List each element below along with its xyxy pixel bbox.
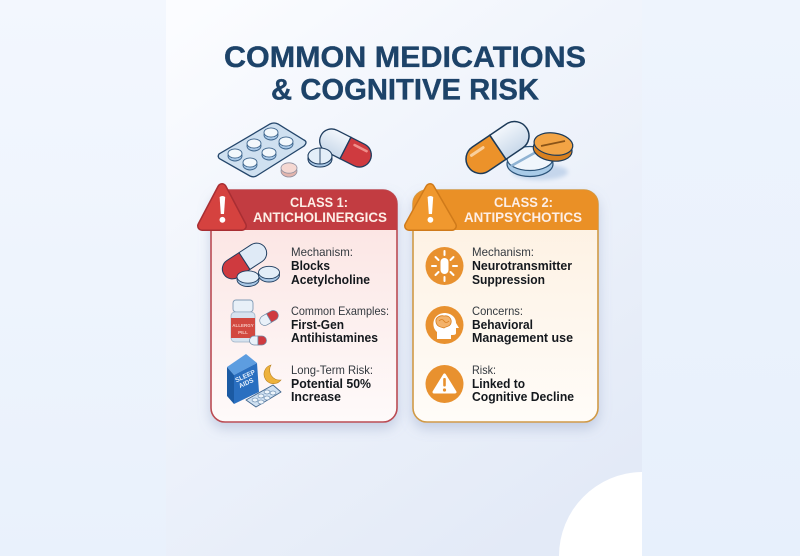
class 2 heading [464,195,582,225]
split tablet [308,148,332,167]
text: risk: Risk: [472,363,496,377]
card body [413,190,598,422]
class 2 heading: ANTIPSYCHOTICS [464,210,582,225]
text: concerns: Management use [472,330,573,345]
icon: sleep aids box [227,354,281,407]
text: long-term risk: Potential 50% [291,376,371,391]
text: risk: Cognitive Decline [472,389,574,404]
title [224,41,586,106]
icon: sleep aids box: SLEEP [234,369,257,384]
text: long-term risk: Long-Term Risk: [291,363,373,377]
pink pill [281,163,297,177]
text: common examples: Antihistamines [291,330,378,345]
text: common examples: Common Examples: [291,304,389,318]
text: concerns: Behavioral [472,317,533,332]
illustration: blister pack and capsule [218,123,375,177]
text: mechanism [291,245,370,287]
tablet shadow [512,164,568,180]
icon: warning circle [426,365,464,403]
text: mechanism [472,245,572,287]
icon: neurotransmitter burst [426,247,464,285]
text: concerns [472,304,573,345]
class 2 heading: CLASS 2: [494,195,553,210]
illustration: orange capsule and tablets [460,116,574,180]
panel: class 2 antipsychotics [409,188,598,422]
text: mechanism: Mechanism: [472,245,534,259]
text: risk [472,363,574,404]
card header [211,190,397,230]
text: mechanism: Neurotransmitter [472,258,572,273]
class 1 heading: ANTICHOLINERGICS [253,210,387,225]
class 1 heading [253,195,387,225]
text: long-term risk [291,363,373,404]
text: risk: Linked to [472,376,525,391]
icon: brain in head [426,306,464,344]
white tablet [507,146,553,176]
icon: allergy pill bottle: ALLERGY [232,323,254,328]
icon: capsule and tablets [219,239,280,286]
text: common examples [291,304,389,345]
orange tablet [532,130,574,164]
text: concerns: Concerns: [472,304,523,318]
warning icon: orange triangle [409,188,452,226]
icon: sleep aids box: AIDS [238,377,255,390]
red and white capsule [316,125,375,171]
warning icon: red triangle [202,188,242,226]
panel: class 1 anticholinergics [202,188,397,422]
icon: allergy pill bottle: PILL [238,330,248,335]
text: long-term risk: Increase [291,389,341,404]
card header [413,190,598,230]
text: mechanism: Acetylcholine [291,272,370,287]
orange capsule [460,116,535,179]
blister pack [218,123,306,177]
text: mechanism: Blocks [291,258,330,273]
text: common examples: First-Gen [291,317,344,332]
icon: allergy pill bottle [231,300,280,345]
text: mechanism: Suppression [472,272,545,287]
text: mechanism: Mechanism: [291,245,353,259]
title: COMMON MEDICATIONS [224,41,586,74]
title: & COGNITIVE RISK [271,74,540,106]
card body [211,190,397,422]
class 1 heading: CLASS 1: [290,195,348,210]
